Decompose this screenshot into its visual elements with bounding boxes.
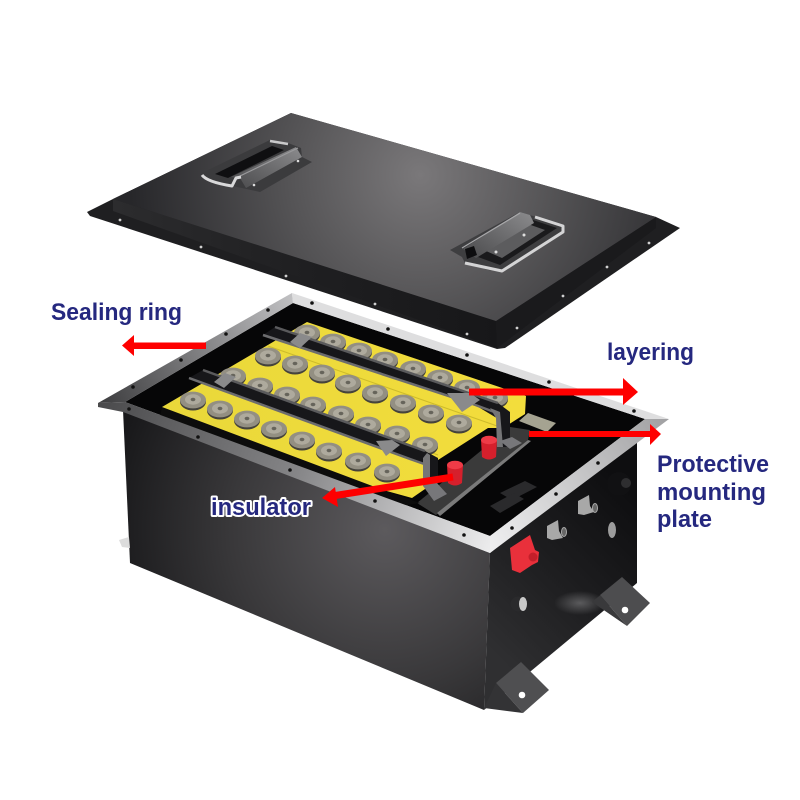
left foot	[484, 662, 549, 713]
small tab behind	[119, 537, 130, 548]
connector ports	[547, 472, 631, 540]
glare on right face	[554, 591, 606, 615]
arrow: layering	[469, 378, 638, 405]
body left face	[123, 410, 490, 710]
box body	[119, 410, 650, 713]
lid flange	[87, 113, 680, 349]
left handle	[202, 140, 312, 192]
knob	[510, 596, 527, 612]
box interior	[125, 303, 645, 536]
terminals row 1	[180, 392, 400, 482]
front strap	[189, 370, 447, 501]
terminals row 3	[255, 348, 472, 434]
right handle	[450, 212, 563, 272]
heading: Protective mounting plate: mounting	[657, 479, 766, 506]
heading: layering: layering	[607, 339, 694, 366]
terminals row 2	[220, 368, 438, 456]
arrow: insulator	[322, 477, 453, 507]
yellow cell tops	[162, 322, 526, 498]
lid top face	[113, 113, 656, 321]
front dark ledge	[160, 407, 420, 509]
heading: Sealing ring: Sealing ring	[51, 299, 182, 326]
lid	[87, 113, 680, 349]
lid screw holes	[119, 219, 650, 335]
lid side left	[113, 199, 497, 348]
lid side right	[496, 217, 656, 348]
terminals row 4	[294, 325, 508, 408]
heading: Protective mounting plate: plate	[657, 506, 712, 533]
heading: Protective mounting plate: Protective	[657, 451, 769, 478]
arrow: Protective mounting plate	[529, 424, 661, 445]
mounting compartment details	[417, 413, 556, 516]
battery cells	[160, 322, 526, 509]
red posts	[447, 436, 497, 486]
back strap	[263, 327, 522, 449]
cell seam	[218, 376, 438, 455]
heading: insulator: insulator	[211, 494, 311, 521]
arrow: Sealing ring	[122, 335, 206, 356]
right foot	[592, 577, 650, 626]
sealing ring flange	[98, 293, 669, 553]
body right face	[484, 430, 637, 710]
flange holes	[127, 301, 636, 537]
red terminal	[510, 535, 539, 573]
